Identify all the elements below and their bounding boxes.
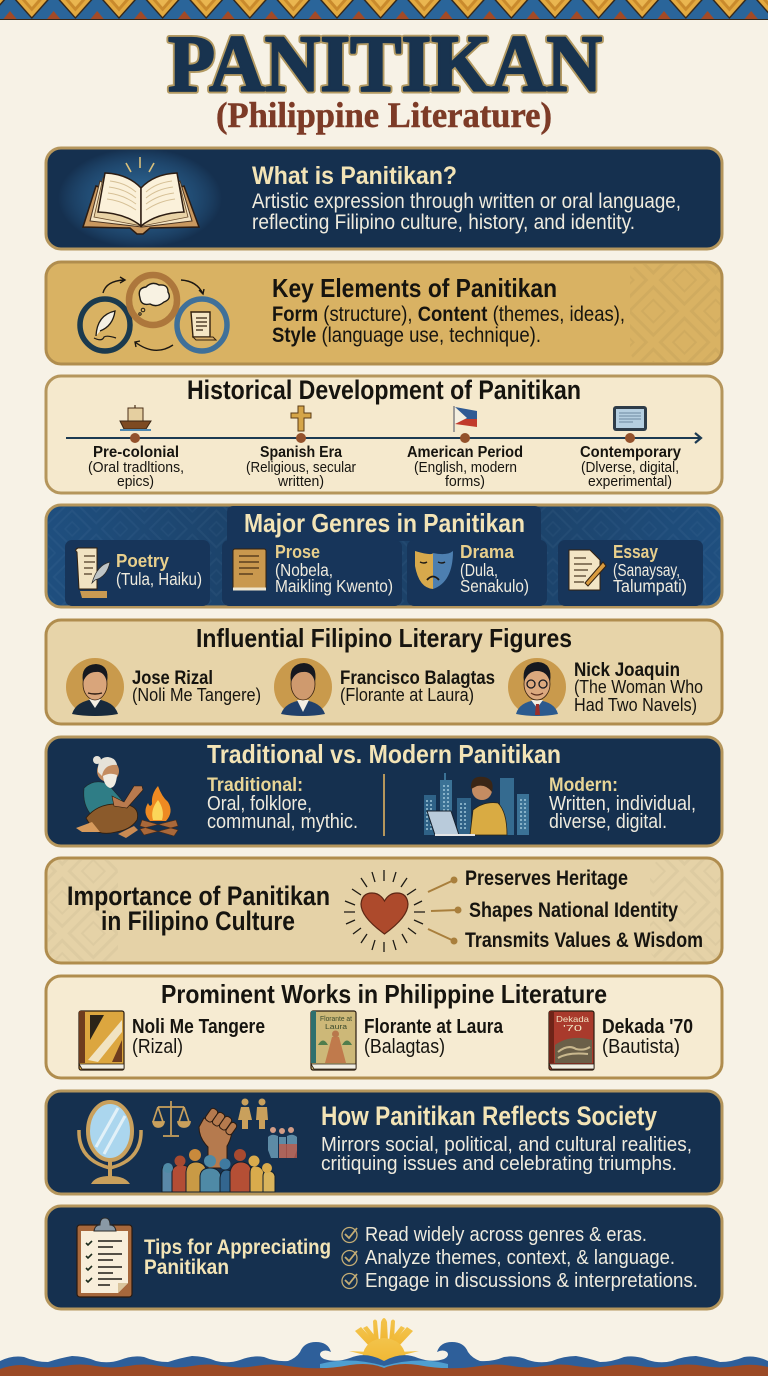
- modern text: Written, individual,: [549, 793, 696, 815]
- heading: Tips for Appreciating: [144, 1235, 331, 1259]
- heading: Influential Filipino Literary Figures: [196, 623, 572, 653]
- era: pre-colonial: (Oral tradltions,: [88, 459, 184, 476]
- icon: elder storyteller: [76, 756, 143, 838]
- era: contemporary: (Dlverse, digital,: [581, 459, 679, 476]
- era: spanish: (Religious, secular: [246, 459, 356, 476]
- figure: jose rizal: Jose Rizal: [132, 667, 213, 689]
- panel: traditional vs modern: [46, 737, 722, 846]
- modern text: Modern:: [549, 774, 618, 796]
- era: american: American Period: [407, 444, 523, 461]
- icon: city and laptop writer: [424, 773, 529, 835]
- era: spanish: written): [277, 473, 324, 490]
- work: dekada 70: (Bautista): [602, 1035, 680, 1058]
- body text: [252, 190, 681, 234]
- callouts with leader lines: Preserves Heritage: [465, 867, 628, 890]
- work: dekada 70: Dekada: [556, 1014, 589, 1024]
- traditional text: Traditional:: [207, 774, 303, 796]
- genre: poetry: [65, 540, 210, 606]
- era: contemporary: experimental): [588, 473, 672, 490]
- figure: francisco balagtas: (Florante at Laura): [340, 685, 474, 705]
- heading: Historical Development of Panitikan: [187, 375, 581, 405]
- body text: [321, 1133, 692, 1175]
- body text: Style (language use, technique).: [272, 324, 541, 347]
- work: florante at laura: Florante at: [320, 1014, 353, 1023]
- era: spanish: Spanish Era: [260, 444, 342, 461]
- icon: raised fist: [199, 1107, 238, 1168]
- era: pre-colonial: epics): [117, 473, 154, 490]
- era: pre-colonial: [88, 444, 184, 490]
- body text: critiquing issues and celebrating triumphs.: [321, 1152, 677, 1175]
- icon: campfire: [140, 786, 178, 836]
- genre: prose: [222, 540, 402, 606]
- genre: essay: Essay: [613, 541, 659, 562]
- era: spanish: [246, 444, 356, 490]
- figure: nick joaquin: Had Two Navels): [574, 695, 697, 715]
- icon: family figures: [238, 1098, 297, 1158]
- era: american: forms): [445, 473, 485, 490]
- icon: rising sun: [349, 1318, 419, 1364]
- panel: literary figures: [46, 620, 722, 724]
- genre: poetry: (Tula, Haiku): [116, 569, 202, 589]
- traditional text: communal, mythic.: [207, 811, 358, 833]
- figure: jose rizal: [66, 658, 261, 716]
- work: dekada 70: '70: [563, 1023, 582, 1033]
- figure: nick joaquin: [508, 658, 703, 716]
- icon: mirror: [79, 1102, 141, 1184]
- modern text: [549, 774, 696, 833]
- panel: importance: [46, 858, 722, 963]
- icon: philippine flag: [454, 406, 477, 432]
- panel: prominent works: [46, 976, 722, 1078]
- modern text: diverse, digital.: [549, 811, 667, 833]
- work: florante at laura: Laura: [325, 1022, 348, 1031]
- body text: reflecting Filipino culture, history, and identity.: [252, 211, 635, 234]
- era: american: [407, 444, 523, 490]
- figure: nick joaquin: (The Woman Who: [574, 677, 703, 697]
- icon: cross: [291, 406, 311, 431]
- subtitle: (Philippine Literature): [216, 95, 552, 135]
- figure: jose rizal: (Noli Me Tangere): [132, 685, 261, 705]
- callouts with leader lines: Shapes National Identity: [469, 899, 678, 922]
- icon: crowd of people: [162, 1149, 275, 1192]
- top decorative woven border: [0, 0, 768, 20]
- work: florante at laura: (Balagtas): [364, 1035, 445, 1058]
- figure: nick joaquin: Nick Joaquin: [574, 659, 680, 681]
- work: noli me tangere: [79, 1011, 265, 1070]
- era: pre-colonial: Pre-colonial: [93, 444, 179, 461]
- heading: How Panitikan Reflects Society: [321, 1101, 657, 1131]
- icon: heart with rays: [344, 870, 425, 952]
- body text: Mirrors social, political, and cultural realities,: [321, 1133, 692, 1156]
- genre: prose: Prose: [275, 541, 320, 562]
- traditional text: Oral, folklore,: [207, 793, 312, 815]
- genre: drama: Senakulo): [460, 576, 529, 596]
- genre: poetry: Poetry: [116, 550, 170, 571]
- icon: three linked rings: [80, 275, 227, 351]
- body text: [272, 303, 625, 347]
- genre: essay: Talumpati): [613, 576, 687, 596]
- heading: What is Panitikan?: [252, 162, 457, 190]
- icon: ship: [120, 405, 151, 431]
- panel: major genres: [46, 505, 722, 607]
- title: PANITIKAN: [168, 20, 602, 108]
- heading: [144, 1235, 331, 1279]
- heading: in Filipino Culture: [101, 906, 295, 936]
- panel: what is panitikan: [46, 148, 722, 249]
- waves: [0, 1342, 768, 1376]
- icon: tablet: [613, 406, 647, 431]
- callouts with leader lines: [428, 867, 703, 952]
- genre: drama: (Dula,: [460, 560, 498, 580]
- timeline axis with arrow: [66, 433, 701, 443]
- genre: essay: (Sanaysay,: [613, 560, 680, 580]
- panel: key elements: [46, 262, 722, 364]
- figure: francisco balagtas: [274, 658, 495, 716]
- body text: Artistic expression through written or oral language,: [252, 190, 681, 213]
- title: PANITIKAN: [168, 20, 602, 108]
- genre: drama: [407, 540, 547, 606]
- era: american: (English, modern: [414, 459, 517, 476]
- icon: open book: [83, 157, 199, 234]
- genre: essay: [558, 540, 703, 606]
- work: florante at laura: [311, 1011, 504, 1070]
- heading: Key Elements of Panitikan: [272, 273, 557, 303]
- figure: francisco balagtas: Francisco Balagtas: [340, 667, 495, 689]
- panel: historical development timeline: [46, 375, 722, 493]
- work: noli me tangere: (Rizal): [132, 1035, 183, 1058]
- work: florante at laura: Florante at Laura: [364, 1015, 504, 1038]
- callouts with leader lines: Transmits Values & Wisdom: [465, 929, 703, 952]
- genre: prose: Maikling Kwento): [275, 576, 393, 596]
- genre: drama: Drama: [460, 541, 515, 562]
- heading: Prominent Works in Philippine Literature: [161, 979, 607, 1009]
- heading: Panitikan: [144, 1255, 229, 1279]
- bottom border: waves and sun: [0, 1318, 768, 1376]
- icon: clipboard checklist: [77, 1218, 132, 1297]
- genre: prose: (Nobela,: [275, 560, 333, 580]
- heading: Importance of Panitikan: [67, 881, 330, 911]
- traditional text: [207, 774, 358, 833]
- work: noli me tangere: Noli Me Tangere: [132, 1015, 265, 1038]
- panel: tips: [46, 1206, 722, 1309]
- icon: scales of justice: [153, 1101, 190, 1136]
- panel: how panitikan reflects society: [46, 1091, 722, 1194]
- era: contemporary: [580, 444, 681, 490]
- heading: Traditional vs. Modern Panitikan: [207, 739, 561, 769]
- work: dekada 70: [549, 1011, 693, 1070]
- body text: Form (structure), Content (themes, ideas),: [272, 303, 625, 326]
- work: dekada 70: Dekada '70: [602, 1015, 693, 1038]
- tip: analyze: Analyze themes, context, & language.: [365, 1246, 675, 1269]
- tip: read widely: Read widely across genres & eras.: [365, 1223, 647, 1246]
- era: contemporary: Contemporary: [580, 444, 681, 461]
- tip: engage: Engage in discussions & interpretations.: [365, 1269, 698, 1292]
- heading: Major Genres in Panitikan: [244, 508, 525, 538]
- heading: [67, 881, 330, 936]
